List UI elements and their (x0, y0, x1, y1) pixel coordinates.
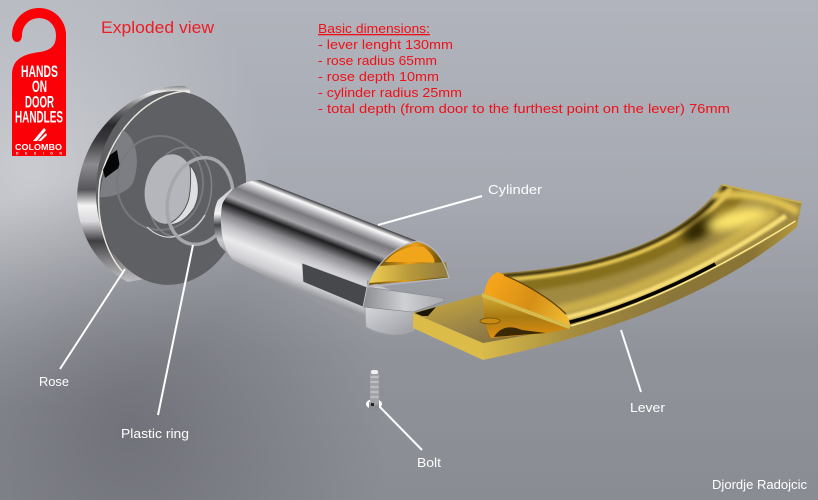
hanger title: HANDS (21, 62, 58, 81)
hanger title: ON (32, 77, 47, 96)
label: plastic ring: Plastic ring (121, 426, 189, 441)
cylinder collar (214, 188, 236, 262)
hanger shape (12, 8, 66, 156)
label: lever: Lever (630, 400, 666, 415)
lever mouth inner line (504, 275, 566, 314)
panel: door-hanger logo (12, 8, 66, 156)
part: cylinder (214, 180, 449, 335)
lever front-left face (413, 313, 483, 360)
rose bright edge (99, 91, 188, 271)
label: bolt: Bolt (417, 455, 441, 470)
cylinder fork blade (363, 287, 445, 312)
lever base plate (413, 294, 572, 343)
text block: basic dimensions: - lever lenght 130mm (318, 37, 453, 52)
lever dark inner corner (415, 307, 436, 316)
hanger title: DOOR (25, 92, 54, 112)
dimensions heading: Basic dimensions: (318, 21, 430, 36)
part: lever (413, 184, 802, 360)
cylinder lower half-disc (365, 307, 413, 334)
part: plastic ring (158, 151, 242, 251)
bolt shaft (370, 370, 379, 405)
arrow: lever (621, 330, 641, 392)
text block: basic dimensions: - rose radius 65mm (318, 53, 437, 68)
rose hole wall (168, 165, 198, 224)
cylinder body (221, 180, 420, 335)
heading: exploded view: Exploded view (101, 18, 215, 37)
arrow: rose (60, 269, 125, 369)
icon: colombo mark (33, 128, 47, 141)
lever arm top (500, 184, 802, 327)
cylinder cut-out (302, 263, 367, 307)
text block: basic dimensions: - rose depth 10mm (318, 69, 439, 84)
rose hole (139, 150, 199, 228)
arrow: cylinder (378, 196, 482, 225)
lever screw hole (480, 318, 500, 324)
arrow: plastic ring (158, 245, 193, 415)
part: rose (77, 86, 253, 290)
text block: basic dimensions (318, 21, 730, 116)
hanger title: HANDLES (15, 108, 63, 126)
leader lines (60, 196, 641, 450)
label: cylinder: Cylinder (488, 182, 543, 197)
text block: basic dimensions: - cylinder radius 25mm (318, 85, 462, 100)
colombo wordmark: COLOMBO (15, 143, 62, 152)
rose dark notch (103, 150, 120, 178)
label: author credit: Djordje Radojcic (712, 477, 807, 492)
lever arm reflections (504, 184, 802, 326)
cylinder end cap gold (367, 242, 449, 285)
text block: basic dimensions: - total depth (from door to the furthest point on the lever) 76mm (318, 101, 730, 116)
rose inner window (100, 130, 137, 197)
lever underside (483, 296, 571, 338)
lever side band (483, 202, 802, 360)
design wordmark: DESIGN (16, 152, 62, 156)
part: bolt (366, 370, 382, 410)
rose ghost rings (117, 136, 218, 242)
part labels (39, 182, 807, 492)
rose face (89, 86, 253, 290)
rose rim (77, 86, 190, 282)
lever open mouth (484, 272, 571, 326)
arrow: bolt (380, 407, 422, 450)
bolt washer (366, 399, 382, 409)
label: rose: Rose (39, 374, 69, 389)
hanger title (15, 62, 63, 126)
